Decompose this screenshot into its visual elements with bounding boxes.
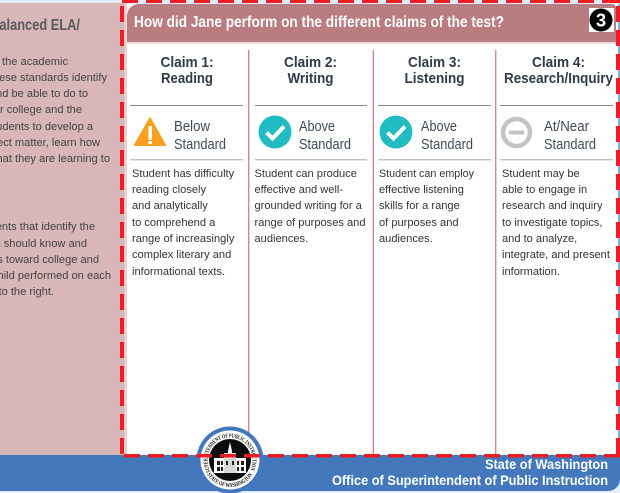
heading: claims question: How did Jane perform on the different claims of the test? <box>134 14 504 31</box>
claim 2 description: range of purposes and <box>254 217 366 229</box>
claim 3 title <box>404 54 464 87</box>
claim 1 title: Claim 1: <box>160 54 214 71</box>
status: above standard <box>299 118 351 153</box>
icon: minus circle <box>503 119 530 146</box>
claim 4 description: Student may be <box>502 168 580 180</box>
status: at/near standard: At/Near <box>544 118 589 135</box>
claim 3 title: Claim 3: <box>408 54 461 71</box>
header bar <box>127 4 617 44</box>
claim 2 description <box>254 168 366 245</box>
status: below standard: Below <box>174 118 210 135</box>
status: above standard: Above <box>299 118 335 135</box>
status: above standard <box>421 118 473 153</box>
text block: academic standards <box>0 56 110 165</box>
claim 2 title: Claim 2: <box>284 54 337 71</box>
claim 4 description: integrate, and present <box>502 249 610 261</box>
claim 2 description: grounded writing for a <box>254 200 363 212</box>
claim 4 description <box>502 168 610 278</box>
claim 1 description: informational texts. <box>132 266 225 278</box>
claim 4 title: Claim 4: <box>532 54 585 71</box>
claim 3 description <box>379 168 474 245</box>
claim 3 description: Student can employ <box>379 168 474 180</box>
claim 1: reading <box>132 54 235 278</box>
claim 2 title: Writing <box>288 70 334 87</box>
panel: left explanation <box>0 3 127 455</box>
claim 2 title <box>284 54 337 87</box>
claim 4 title <box>504 54 614 87</box>
claim 3 description: effective listening <box>379 184 464 196</box>
status: above standard: Standard <box>421 136 473 153</box>
status: at/near standard <box>544 118 596 153</box>
icon: check circle <box>380 116 412 148</box>
claim 1 title <box>160 54 214 87</box>
claim 1 description: reading closely <box>132 184 206 196</box>
status: below standard: Standard <box>174 136 226 153</box>
status: below standard <box>174 118 226 153</box>
seal: Office of Superintendent of Public Instruction <box>197 426 264 493</box>
column dividers <box>130 50 613 455</box>
text block: claims explanation <box>0 221 111 298</box>
icon: check circle <box>258 116 292 148</box>
badge: number 3 <box>589 8 614 32</box>
claim 1 description: Student has difficulty <box>132 168 235 180</box>
claim 4 description: able to engage in <box>502 184 587 196</box>
claim 3: listening <box>379 54 474 245</box>
claim 1 description: to comprehend a <box>132 217 216 229</box>
footer text: State of Washington <box>485 456 608 472</box>
status: above standard: Above <box>421 118 457 135</box>
icon: warning triangle <box>135 118 165 145</box>
claim 3 description: skills for a range <box>379 200 460 212</box>
footer bar <box>0 455 620 491</box>
claim 2: writing <box>254 54 366 245</box>
claim 2 description: audiences. <box>254 233 308 245</box>
claim 4: research/inquiry <box>502 54 614 278</box>
claim 2 description: effective and well- <box>254 184 343 196</box>
badge: number 3: 3 <box>596 10 606 30</box>
claim 3 description: audiences. <box>379 233 433 245</box>
text block: claims explanation: to the right. <box>0 286 54 298</box>
seal: Office of Superintendent of Public Instruction: SUPERINTENDENT OF PUBLIC INSTRUCTION <box>204 434 256 473</box>
seal: Office of Superintendent of Public Instruction: STATE OF WASHINGTON <box>207 472 252 488</box>
claim 1 description: and analytically <box>132 200 208 212</box>
claim 1 description: complex literary and <box>132 249 231 261</box>
claim 3 description: of purposes and <box>379 217 459 229</box>
claim 3 title: Listening <box>404 70 464 87</box>
panel: claims <box>127 4 620 456</box>
status: at/near standard: Standard <box>544 136 596 153</box>
claim 1 description <box>132 168 235 278</box>
text block: academic standards: the academic <box>2 56 68 68</box>
claim 4 description: research and inquiry <box>502 200 603 212</box>
claim 4 description: to investigate topics, <box>502 217 603 229</box>
status: above standard: Standard <box>299 136 351 153</box>
claim 4 description: information. <box>502 266 560 278</box>
red dashed highlight frame <box>120 0 620 458</box>
claim 1 description: range of increasingly <box>132 233 235 245</box>
claim 4 description: and to analyze, <box>502 233 577 245</box>
claim 1 title: Reading <box>161 70 213 87</box>
footer text <box>332 456 608 488</box>
claim 2 description: Student can produce <box>254 168 357 180</box>
